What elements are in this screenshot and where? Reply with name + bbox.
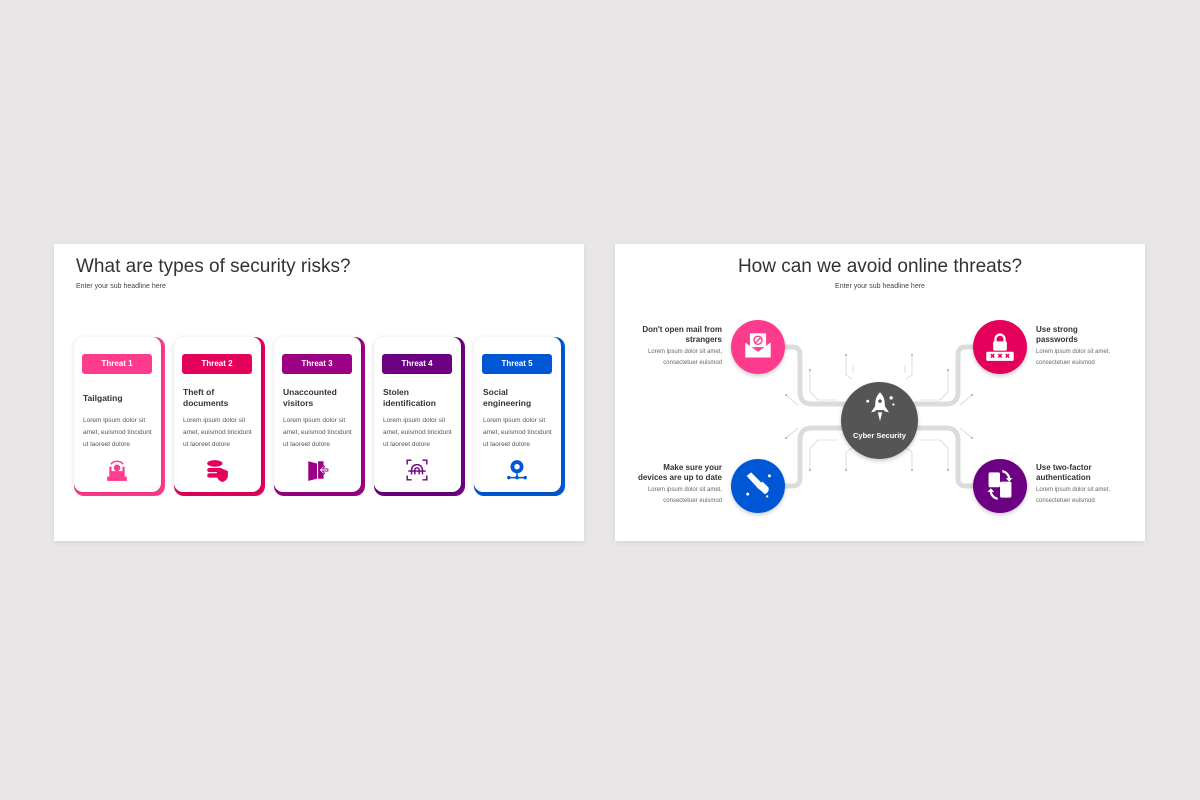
text: two-factor: Use two-factor authentication: [1036, 463, 1092, 482]
circle: mail: [731, 320, 785, 374]
panel: security risks: [54, 244, 584, 541]
card: threat 5: Threat 5: [501, 359, 533, 368]
subheadline right: Enter your sub headline here: [835, 283, 925, 290]
subheadline left: Enter your sub headline here: [76, 283, 166, 290]
text: passwords: [1036, 325, 1110, 366]
text: mail: Don't open mail from strangers: [642, 325, 722, 344]
card: threat 3: Threat 3: [301, 359, 333, 368]
center circle: cyber security: Cyber Security: [853, 431, 906, 440]
text: mail: [642, 325, 722, 366]
card: threat 4: Threat 4: [401, 359, 433, 368]
icon: door enter: [308, 461, 328, 481]
text: devices: Make sure your devices are up to date: [638, 463, 722, 482]
card: threat 1: [74, 337, 165, 496]
circle: update devices: [731, 459, 785, 513]
circle: two-factor: [973, 459, 1027, 513]
icon: tailgating: [107, 460, 127, 481]
title left: What are types of security risks?: [76, 256, 351, 277]
card: threat 4: [374, 337, 465, 496]
card: threat 3: [274, 337, 365, 496]
text: two-factor: Lorem ipsum dolor sit amet, consectetuer euismod: [1036, 487, 1110, 504]
icon: fingerprint: [406, 460, 428, 480]
text: devices: Lorem ipsum dolor sit amet, consectetuer euismod: [648, 487, 722, 504]
title right: How can we avoid online threats?: [738, 256, 1022, 277]
text: two-factor: [1036, 463, 1110, 504]
card: threat 5: Lorem ipsum dolor sit amet, euismod tincidunt ut laoreet dolore: [483, 417, 552, 448]
panel: avoid online threats: [615, 244, 1145, 541]
text: passwords: Use strong passwords: [1036, 325, 1078, 344]
center circle: cyber security: [841, 382, 918, 459]
text: devices: [638, 463, 722, 504]
card: threat 1: Threat 1: [101, 359, 133, 368]
icon: rocket: [866, 392, 894, 421]
text: passwords: Lorem ipsum dolor sit amet, consectetuer euismod: [1036, 349, 1110, 366]
card: threat 3: Unaccounted visitors: [283, 387, 337, 408]
card: threat 1: Lorem ipsum dolor sit amet, euismod tincidunt ut laoreet dolore: [83, 417, 152, 448]
card: threat 2: Threat 2: [201, 359, 233, 368]
card: threat 2: Lorem ipsum dolor sit amet, euismod tincidunt ut laoreet dolore: [183, 417, 252, 448]
card: threat 1: Tailgating: [83, 393, 123, 403]
circuit lines: [785, 344, 973, 488]
card: threat 5: [474, 337, 565, 496]
card: threat 5: Social engineering: [483, 387, 531, 408]
card: threat 3: Lorem ipsum dolor sit amet, euismod tincidunt ut laoreet dolore: [283, 417, 352, 448]
card: threat 4: Stolen identification: [383, 387, 436, 408]
icon: gear network: [507, 460, 527, 480]
card: threat 2: Theft of documents: [183, 387, 228, 408]
card: threat 4: Lorem ipsum dolor sit amet, euismod tincidunt ut laoreet dolore: [383, 417, 452, 448]
card: threat 2: [174, 337, 265, 496]
text: mail: Lorem ipsum dolor sit amet, consectetuer euismod: [648, 349, 722, 366]
circle: password: [973, 320, 1027, 374]
icon: database money: [207, 460, 228, 482]
